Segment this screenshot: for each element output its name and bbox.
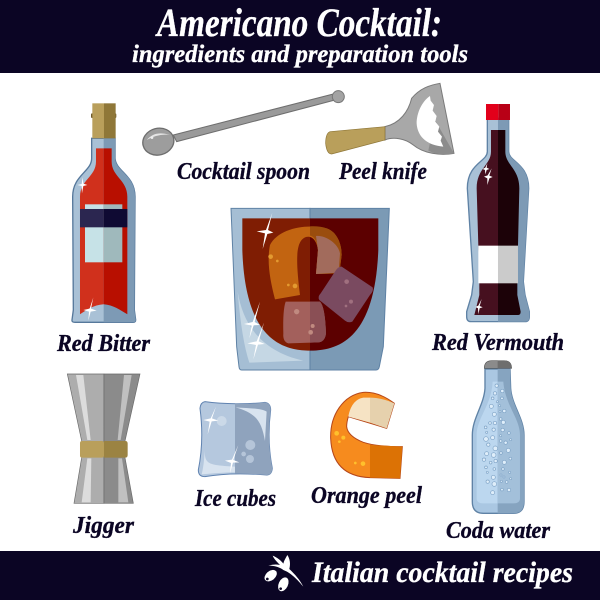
header band [0,0,600,73]
title: Americano Cocktail: [155,0,442,45]
red bitter bottle [72,103,136,322]
cocktail spoon label: Cocktail spoon [177,159,310,185]
ice cube [198,402,272,477]
peel knife label: Peel knife [338,159,427,185]
subtitle: ingredients and preparation tools [132,41,468,68]
coda water bottle [472,361,524,513]
red bitter label: Red Bitter [56,331,151,357]
jigger [67,374,140,503]
footer band [0,551,600,600]
glass with americano [231,208,389,370]
bubbles [482,384,512,495]
icon: olive branch [262,555,303,593]
peel knife [326,83,454,154]
orange peel label: Orange peel [311,483,422,509]
cocktail spoon [140,91,344,159]
jigger label: Jigger [72,513,135,539]
footer text: Italian cocktail recipes [311,556,573,589]
red vermouth label: Red Vermouth [431,330,564,356]
coda water label: Coda water [446,518,551,544]
orange peel [331,392,402,478]
ice cubes label: Ice cubes [194,486,276,512]
red vermouth bottle [467,104,529,322]
